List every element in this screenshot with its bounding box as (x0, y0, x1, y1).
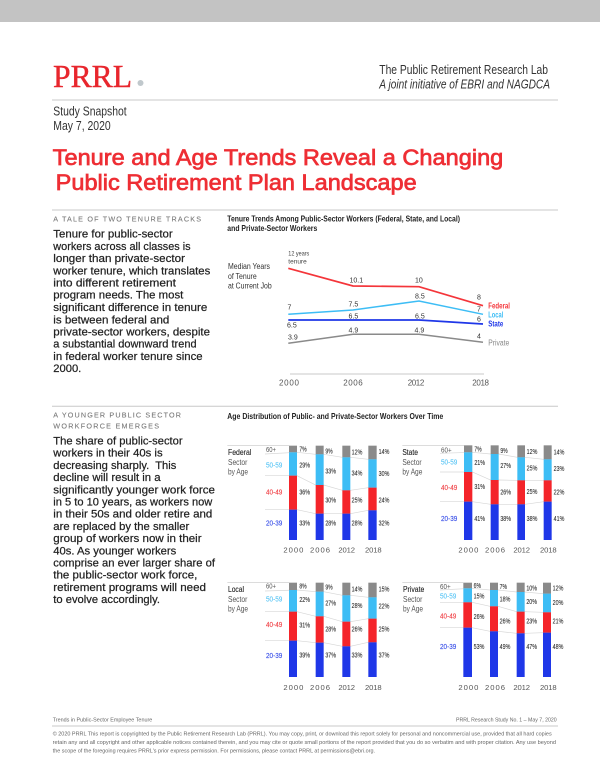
footer: copyright notice: © 2020 PRRL This report is copyrighted by the Public Retirement Research Lab (PRRL). You may copy, print, or download this report solely for personal and noncommercial use, provided that all hard copies (53, 731, 552, 738)
bar: state 2012 (517, 445, 537, 540)
year labels: 2006 (310, 683, 330, 692)
bar: federal 2012: 25% (352, 497, 362, 504)
bar: state 2012: 25% (527, 489, 537, 496)
series: state: 6 (477, 317, 481, 324)
title: Tenure and Age Trends Reveal a Changing (53, 145, 503, 170)
bar: state 2006: 27% (500, 463, 511, 470)
age group labels (441, 447, 457, 523)
bar: state 2006 (491, 445, 511, 540)
x axis years (279, 379, 490, 388)
bar: local 2018: 15% (379, 586, 389, 593)
chart title: age distribution: Age Distribution of Public- and Private-Sector Workers Over Time (227, 411, 444, 421)
year labels (458, 546, 557, 555)
age group labels: 20-39 (441, 516, 457, 523)
text block: tenure summary: worker tenure, which translates (52, 265, 211, 277)
organisation name: The Public Retirement Research Lab (379, 63, 548, 77)
age group labels: 40-49 (266, 622, 282, 629)
text block: age summary: significantly younger work force (53, 484, 215, 496)
bar: local 2006: 28% (325, 627, 336, 634)
footer: report name: Trends in Public-Sector Employee Tenure (53, 718, 152, 724)
bar: local 2012: 26% (352, 627, 362, 634)
bar: federal 2012: 28% (352, 521, 362, 528)
section heading: tenure tracks: A TALE OF TWO TENURE TRACKS (53, 215, 201, 224)
text block: age summary: in their 50s and older retire and (53, 509, 212, 521)
year labels: 2018 (540, 683, 557, 692)
footer: copyright notice (53, 731, 556, 755)
age group labels: 50-59 (266, 462, 282, 469)
bar: federal 2018: 24% (379, 497, 389, 504)
bar: private 2000: 15% (474, 594, 484, 601)
age group labels: 20-39 (440, 644, 456, 651)
text block: age summary: the public-sector work force, (53, 570, 197, 582)
series: private: 4 (477, 333, 481, 340)
series: state (287, 313, 504, 330)
title (53, 145, 503, 195)
panel label: federal: Federal (228, 448, 252, 457)
text block: tenure summary: 2000. (53, 363, 81, 375)
text block: age summary: decline will result in a (53, 472, 161, 484)
x axis years: 2012 (408, 379, 425, 388)
text block: tenure summary: workers across all classes is (52, 241, 191, 253)
age group labels: 20-39 (266, 521, 282, 528)
bar: state 2018: 14% (554, 449, 564, 456)
panel label: state: Sector (402, 458, 422, 467)
bar: federal 2012: 12% (352, 449, 362, 456)
series: federal: 10.1 (350, 278, 363, 285)
study snapshot and date (53, 105, 127, 133)
bar: local 2006: 9% (325, 584, 333, 591)
bar: local 2018: 37% (379, 653, 389, 660)
year labels: 2000 (458, 683, 478, 692)
panel label: private: by Age (403, 605, 423, 614)
panel label: federal: by Age (228, 467, 248, 476)
bar: federal 2000: 36% (299, 490, 310, 497)
year labels: 2012 (513, 683, 530, 692)
bar: private 2012: 23% (526, 618, 537, 625)
age group labels: 40-49 (441, 485, 457, 492)
axis label (228, 262, 272, 290)
year labels: 2000 (458, 546, 478, 555)
series: private: Private (488, 338, 510, 347)
organisation name: A joint initiative of EBRI and NAGDCA (378, 77, 550, 91)
text block: age summary: are replaced by the smaller (53, 521, 190, 533)
bar: private 2012: 47% (526, 644, 537, 651)
x axis years: 2000 (279, 379, 300, 388)
bar: federal 2000: 7% (299, 446, 307, 453)
panel label: local: Sector (228, 595, 248, 604)
bar: private 2018: 12% (553, 586, 563, 593)
text block: tenure summary: in federal worker tenure since (53, 351, 203, 363)
bar: federal 2000 (289, 446, 310, 540)
bar: federal 2012: 34% (352, 471, 362, 478)
series: local: 7.5 (348, 302, 358, 309)
bar: local 2000: 22% (299, 597, 310, 604)
bar: private 2006: 49% (500, 644, 510, 651)
bar: local 2018: 22% (379, 604, 389, 611)
text block: age summary: The share of public-sector (53, 436, 183, 448)
panel label: state: by Age (402, 467, 423, 476)
year labels: 2000 (283, 546, 303, 555)
bar: private 2000: 53% (474, 644, 484, 651)
panel: federal sector (227, 446, 389, 555)
bar: local 2018 (368, 583, 389, 677)
bar: private 2018 (543, 583, 563, 677)
series: private: 4.9 (348, 328, 358, 335)
bar: state 2000: 31% (474, 484, 485, 491)
series: state: 6.5 (415, 313, 425, 320)
series: local: Local (488, 311, 503, 320)
bar: federal 2000: 33% (299, 521, 310, 528)
study snapshot and date: May 7, 2020 (53, 119, 111, 133)
year labels (283, 683, 382, 692)
bar: private 2012 (517, 583, 537, 677)
year labels (283, 546, 382, 555)
x axis years: 2018 (472, 379, 490, 388)
series: federal: 8 (477, 295, 481, 302)
bar: state 2018: 23% (554, 466, 564, 473)
panel label: state: State (402, 448, 418, 457)
age group labels: 20-39 (266, 653, 282, 660)
panel label: federal (228, 448, 252, 476)
bar: federal 2018: 32% (379, 521, 389, 528)
series: local: 8.5 (415, 293, 425, 300)
bar: local 2012: 28% (352, 603, 362, 610)
series: private: 3.9 (288, 334, 298, 341)
bar: state 2012: 25% (527, 465, 537, 472)
chart title: tenure trends: and Private-Sector Workers (227, 223, 318, 233)
bar: federal 2018 (368, 446, 389, 540)
bar: local 2000: 31% (299, 622, 310, 629)
age group labels: 50-59 (440, 594, 456, 601)
bar: federal 2006: 30% (325, 497, 336, 504)
bar: federal 2006: 33% (325, 468, 336, 475)
axis label: at Current Job (228, 281, 272, 290)
panel: local sector (227, 583, 389, 692)
series: private (288, 328, 510, 347)
year labels: 2012 (338, 683, 355, 692)
text block: tenure summary: is between federal and (53, 314, 169, 326)
age group labels (266, 584, 282, 660)
bar: local 2006: 27% (325, 600, 336, 607)
series: local: 7 (288, 304, 292, 311)
age group labels: 40-49 (266, 489, 282, 496)
age group labels: 60+ (266, 584, 276, 591)
panel label: private: Sector (403, 595, 423, 604)
bar: private 2000 (463, 583, 484, 677)
series: state: State (488, 320, 504, 329)
bar: federal 2018: 14% (379, 449, 389, 456)
series: private: 4.9 (414, 328, 424, 335)
series: state: 6.5 (287, 323, 297, 330)
bar: state 2006: 38% (500, 516, 511, 523)
age group labels: 50-59 (266, 597, 282, 604)
year labels (458, 683, 557, 692)
chart title: tenure trends: Tenure Trends Among Public-Sector Workers (Federal, State, and Local) (227, 214, 460, 224)
text block: age summary: decreasing sharply. This (53, 460, 177, 472)
text block: tenure summary: Tenure for public-sector (53, 229, 173, 241)
year labels: 2006 (310, 546, 330, 555)
year labels: 2018 (365, 683, 382, 692)
bar: local 2000: 39% (299, 653, 310, 660)
age group labels (266, 447, 282, 528)
text block: tenure summary: private-sector workers, despite (53, 326, 210, 338)
bar: state 2006: 26% (500, 489, 511, 496)
panel label: private: Private (403, 585, 425, 594)
axis label: of Tenure (228, 272, 257, 281)
bar: state 2018: 41% (554, 516, 564, 523)
bar: private 2006: 26% (500, 618, 510, 625)
year labels: 2018 (540, 546, 557, 555)
age group labels: 60+ (441, 447, 452, 454)
text block: tenure summary (52, 229, 211, 375)
series: federal: Federal (488, 301, 510, 310)
bar: local 2012: 33% (352, 653, 362, 660)
bar: private 2000: 26% (474, 614, 484, 621)
text block: tenure summary: significant difference in tenure (53, 302, 207, 314)
panel: private sector (402, 583, 563, 692)
top gray band (0, 0, 600, 22)
series: local (288, 293, 503, 320)
bar: federal 2006: 9% (325, 448, 333, 455)
year labels: 2012 (513, 546, 530, 555)
bar: local 2000: 8% (299, 584, 307, 591)
bar: local 2012 (342, 583, 362, 677)
text block: age summary: workers in their 40s is (52, 448, 163, 460)
bar: private 2006: 18% (500, 596, 510, 603)
panel label: private (403, 585, 425, 614)
panel label: federal: Sector (228, 458, 248, 467)
age group labels: 60+ (440, 584, 451, 591)
text block: age summary: to evolve accordingly. (53, 594, 160, 606)
bar: state 2012: 38% (527, 516, 537, 523)
series: federal: 10 (415, 278, 423, 285)
year labels: 2018 (365, 546, 382, 555)
bar: state 2000 (464, 445, 485, 540)
bar: state 2018 (544, 445, 564, 540)
footer: copyright notice: the scope of the foregoing requires PRRL's prior express permission. For permissions, please contact PRRL at permissions@ebri.org. (53, 749, 375, 755)
year labels: 2006 (485, 546, 505, 555)
bar: federal 2018: 30% (379, 471, 389, 478)
bar: local 2006: 37% (325, 653, 336, 660)
bar: state 2012: 12% (527, 449, 537, 456)
text block: tenure summary: longer than private-sector (53, 253, 185, 265)
bar: state 2000: 7% (474, 447, 482, 454)
bar: private 2018: 21% (553, 618, 563, 625)
panel label: local (228, 585, 248, 614)
bar: private 2012: 20% (526, 599, 537, 606)
series: federal: tenure (288, 258, 307, 265)
bar: local 2000 (289, 583, 310, 677)
bar: private 2018: 48% (553, 644, 563, 651)
footer: study number: PRRL Research Study No. 1 – May 7, 2020 (456, 718, 557, 724)
logo: PRRL: PRRL (53, 58, 132, 94)
bar: federal 2000: 29% (299, 462, 310, 469)
bar: private 2006 (490, 583, 510, 677)
age group labels (440, 584, 456, 651)
bar: private 2012: 10% (526, 585, 537, 592)
section heading: younger workforce: WORKFORCE EMERGES (53, 421, 159, 430)
axis label: Median Years (228, 262, 270, 271)
age group labels: 50-59 (441, 460, 457, 467)
section heading: younger workforce: A YOUNGER PUBLIC SECTOR (53, 410, 181, 419)
text block: age summary (52, 436, 216, 606)
panel label: state (402, 448, 423, 476)
bar: federal 2006 (316, 446, 336, 540)
chart title: tenure trends (227, 214, 460, 233)
series: local: 7 (477, 307, 481, 314)
text block: tenure summary: program needs. The most (53, 290, 183, 302)
panel: state sector (402, 445, 564, 555)
study snapshot and date: Study Snapshot (53, 105, 127, 119)
year labels: 2012 (338, 546, 355, 555)
panel label: local: Local (228, 585, 244, 594)
bar: local 2006 (316, 583, 336, 677)
bar: state 2018: 22% (554, 489, 564, 496)
bar: local 2012: 14% (352, 586, 362, 593)
bar: state 2006: 9% (500, 448, 508, 455)
footer: copyright notice: retain any and all copyright and other applicable notices contained therein, and you may cite or quote small portions of the report provided that you do so verbatim and with proper citation. Any use beyond (53, 740, 556, 746)
year labels: 2006 (485, 683, 505, 692)
bar: private 2000: 6% (474, 583, 481, 590)
bar: federal 2006: 28% (325, 521, 336, 528)
bar: private 2018: 20% (553, 600, 563, 607)
age group labels: 60+ (266, 447, 276, 454)
year labels: 2000 (283, 683, 303, 692)
text block: age summary: 40s. As younger workers (53, 545, 177, 557)
bar: private 2006: 7% (500, 584, 507, 591)
series: federal: 12 years (288, 251, 310, 258)
x axis years: 2006 (343, 379, 363, 388)
bar: state 2000: 21% (474, 460, 485, 467)
bar: state 2000: 41% (474, 516, 485, 523)
bar: federal 2012 (342, 446, 362, 540)
section heading: younger workforce (53, 410, 181, 430)
text block: tenure summary: into different retirement (53, 278, 176, 290)
title: Public Retirement Plan Landscape (56, 170, 417, 195)
text block: age summary: in 5 to 10 years, as workers now (53, 497, 213, 509)
bar: local 2018: 25% (379, 627, 389, 634)
text block: age summary: comprise an ever larger share of (53, 558, 216, 570)
text block: age summary: retirement programs will need (53, 582, 206, 594)
series: state: 6.5 (348, 313, 358, 320)
series: federal (288, 251, 510, 310)
line chart: median years of tenure (228, 251, 510, 388)
organisation name (378, 63, 550, 91)
panel label: local: by Age (228, 605, 248, 614)
text block: age summary: group of workers now in their (53, 533, 202, 545)
text block: tenure summary: a substantial downward trend (53, 339, 197, 351)
age group labels: 40-49 (440, 614, 456, 621)
